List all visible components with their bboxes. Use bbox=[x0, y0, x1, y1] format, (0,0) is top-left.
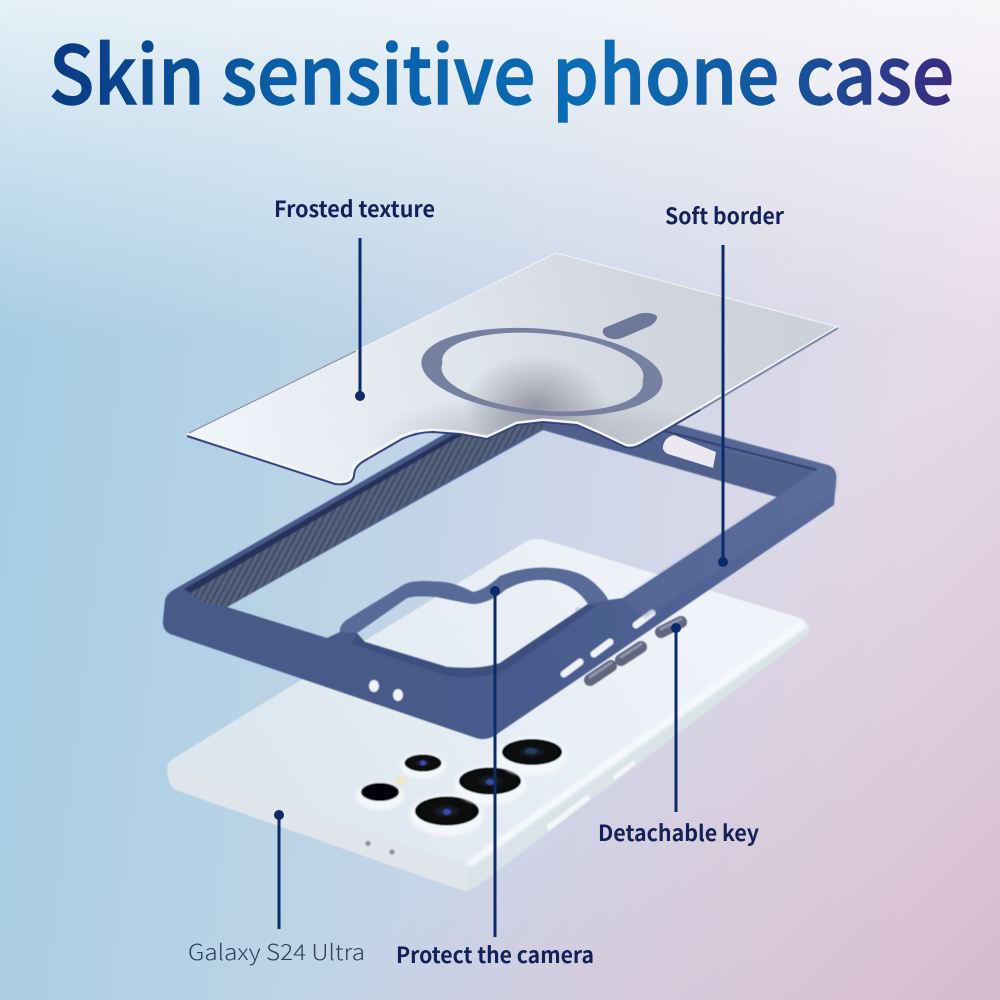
label: frosted texture: Frosted texture bbox=[274, 192, 435, 224]
alignment pill bbox=[603, 313, 657, 339]
phone right edge highlight bbox=[466, 620, 807, 867]
leader: frosted texture bbox=[355, 238, 365, 401]
title: Skin sensitive phone case bbox=[49, 12, 954, 128]
camera lenses bbox=[356, 736, 567, 836]
phone bottom edge bbox=[168, 764, 467, 891]
frame right bar highlight bbox=[623, 467, 836, 618]
charging and mic holes bbox=[369, 680, 403, 701]
label: protect the camera: Protect the camera bbox=[396, 938, 594, 970]
magnet ring bbox=[418, 319, 666, 425]
plate lower dark line bbox=[187, 410, 700, 484]
plate right edge bbox=[700, 328, 838, 410]
leader: soft border bbox=[718, 245, 728, 567]
phone: Galaxy S24 Ultra bbox=[167, 539, 809, 891]
back cover plate bbox=[187, 253, 838, 484]
logo mark: NG bbox=[573, 604, 591, 619]
frame back wall bbox=[543, 415, 815, 497]
phone back face bbox=[170, 539, 803, 864]
frame inner wall ribs bbox=[187, 412, 545, 607]
slot in frame bbox=[663, 435, 716, 468]
frame ring upper face bbox=[340, 568, 608, 633]
frame inner groove bbox=[184, 408, 500, 593]
plate lower rim bbox=[187, 327, 838, 482]
label: galaxy s24 ultra: Galaxy S24 Ultra bbox=[188, 935, 365, 967]
volume and power keys bbox=[590, 619, 681, 680]
label: detachable key: Detachable key bbox=[598, 816, 759, 848]
magnet shadow bbox=[399, 361, 672, 444]
leader: galaxy bbox=[274, 810, 284, 929]
label: soft border: Soft border bbox=[665, 199, 784, 231]
phone right edge bbox=[467, 627, 809, 890]
button holes bbox=[564, 613, 652, 674]
plate top edges bbox=[187, 253, 838, 434]
microphone holes bbox=[366, 841, 394, 854]
frame body bbox=[163, 385, 836, 739]
leader: protect the camera bbox=[490, 586, 500, 937]
side key on phone edge bbox=[546, 794, 590, 831]
frame ring shading bbox=[352, 604, 596, 677]
case frame bbox=[163, 385, 836, 739]
leader: detachable key bbox=[671, 623, 681, 812]
frame back groove bbox=[660, 430, 817, 470]
plate body bbox=[187, 253, 838, 482]
phone body bbox=[167, 539, 809, 890]
